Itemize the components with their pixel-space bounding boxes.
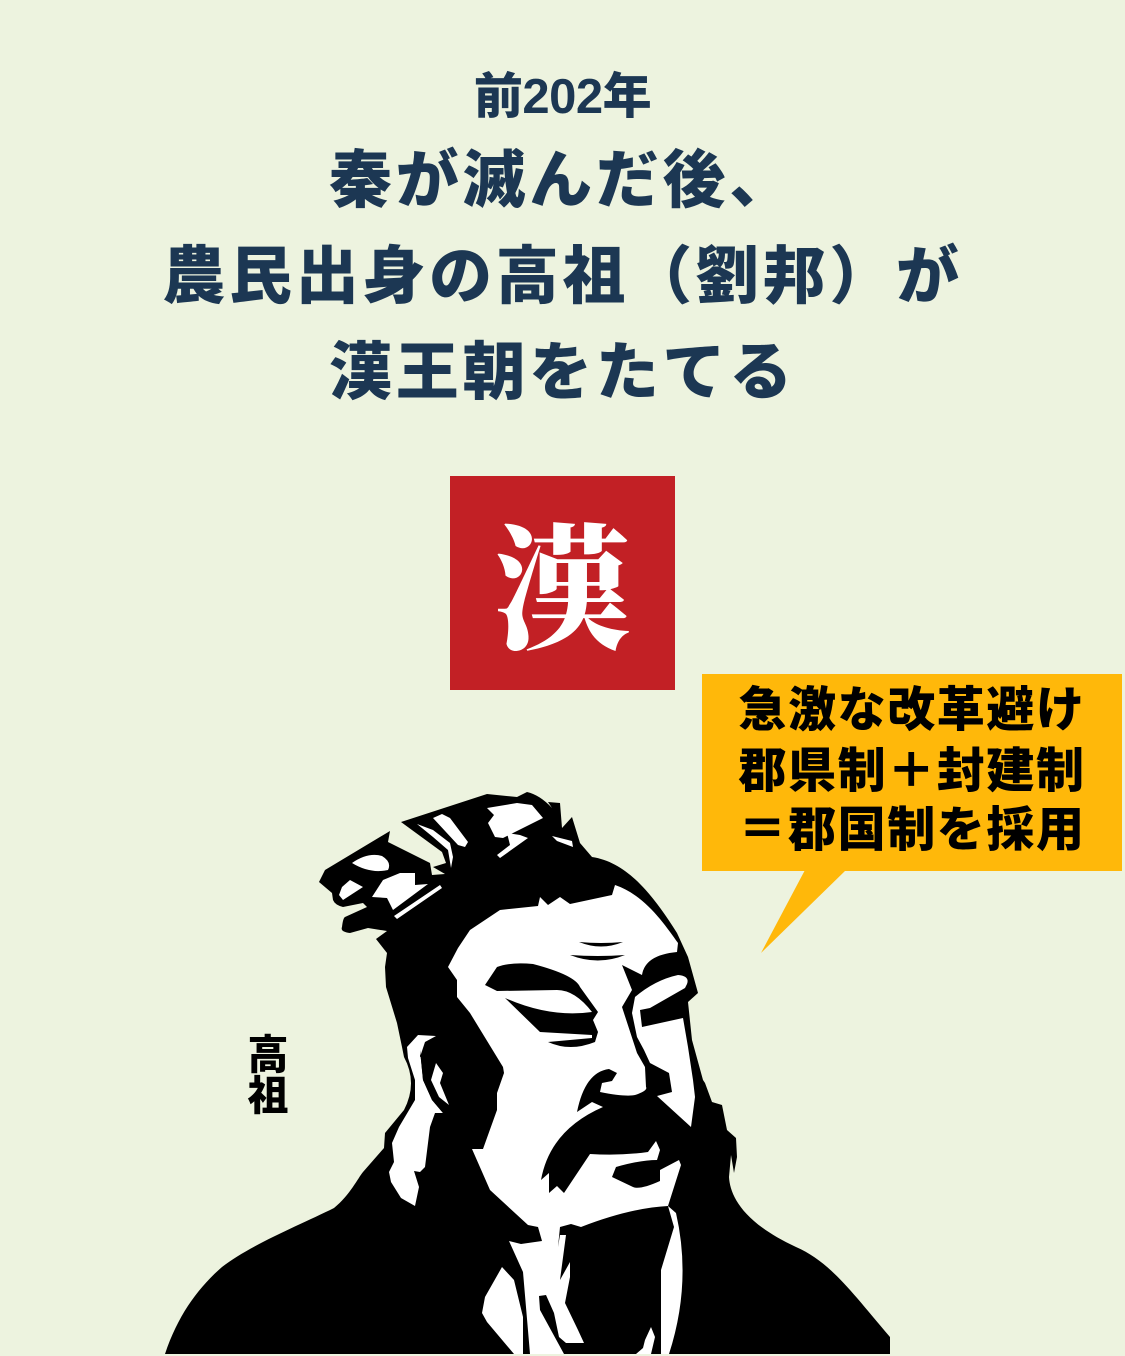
bubble text: 郡県制＋封建制 [738,745,1086,798]
bubble text: 急激な改革避け [738,684,1086,737]
right cheek and eye [632,975,695,1127]
robe highlights [482,1267,655,1354]
date heading: 前202年 [474,70,651,124]
title: 秦が滅んだ後、 [329,146,796,216]
forehead wrinkles [570,942,625,960]
name label: Gaozu: 高 [248,1032,288,1078]
bubble text [738,684,1086,857]
speech bubble [702,674,1122,871]
crown highlights [339,803,573,919]
beard highlight [661,1206,683,1354]
title [162,146,963,408]
ear highlight [431,1063,449,1105]
name label: Gaozu: 祖 [248,1073,288,1119]
ear shadow [420,1050,448,1113]
silhouette [165,792,890,1354]
title: 漢王朝をたてる [329,338,796,408]
left eye and brow [485,963,598,1047]
bubble text: ＝郡国制を採用 [738,804,1086,857]
red dynasty seal: 漢 [494,518,630,668]
title: 農民出身の高祖（劉邦）が [162,242,963,312]
name label: Gaozu [248,1032,288,1119]
red dynasty seal [450,476,675,690]
face [448,885,681,1354]
hair ribbon [389,1035,443,1206]
